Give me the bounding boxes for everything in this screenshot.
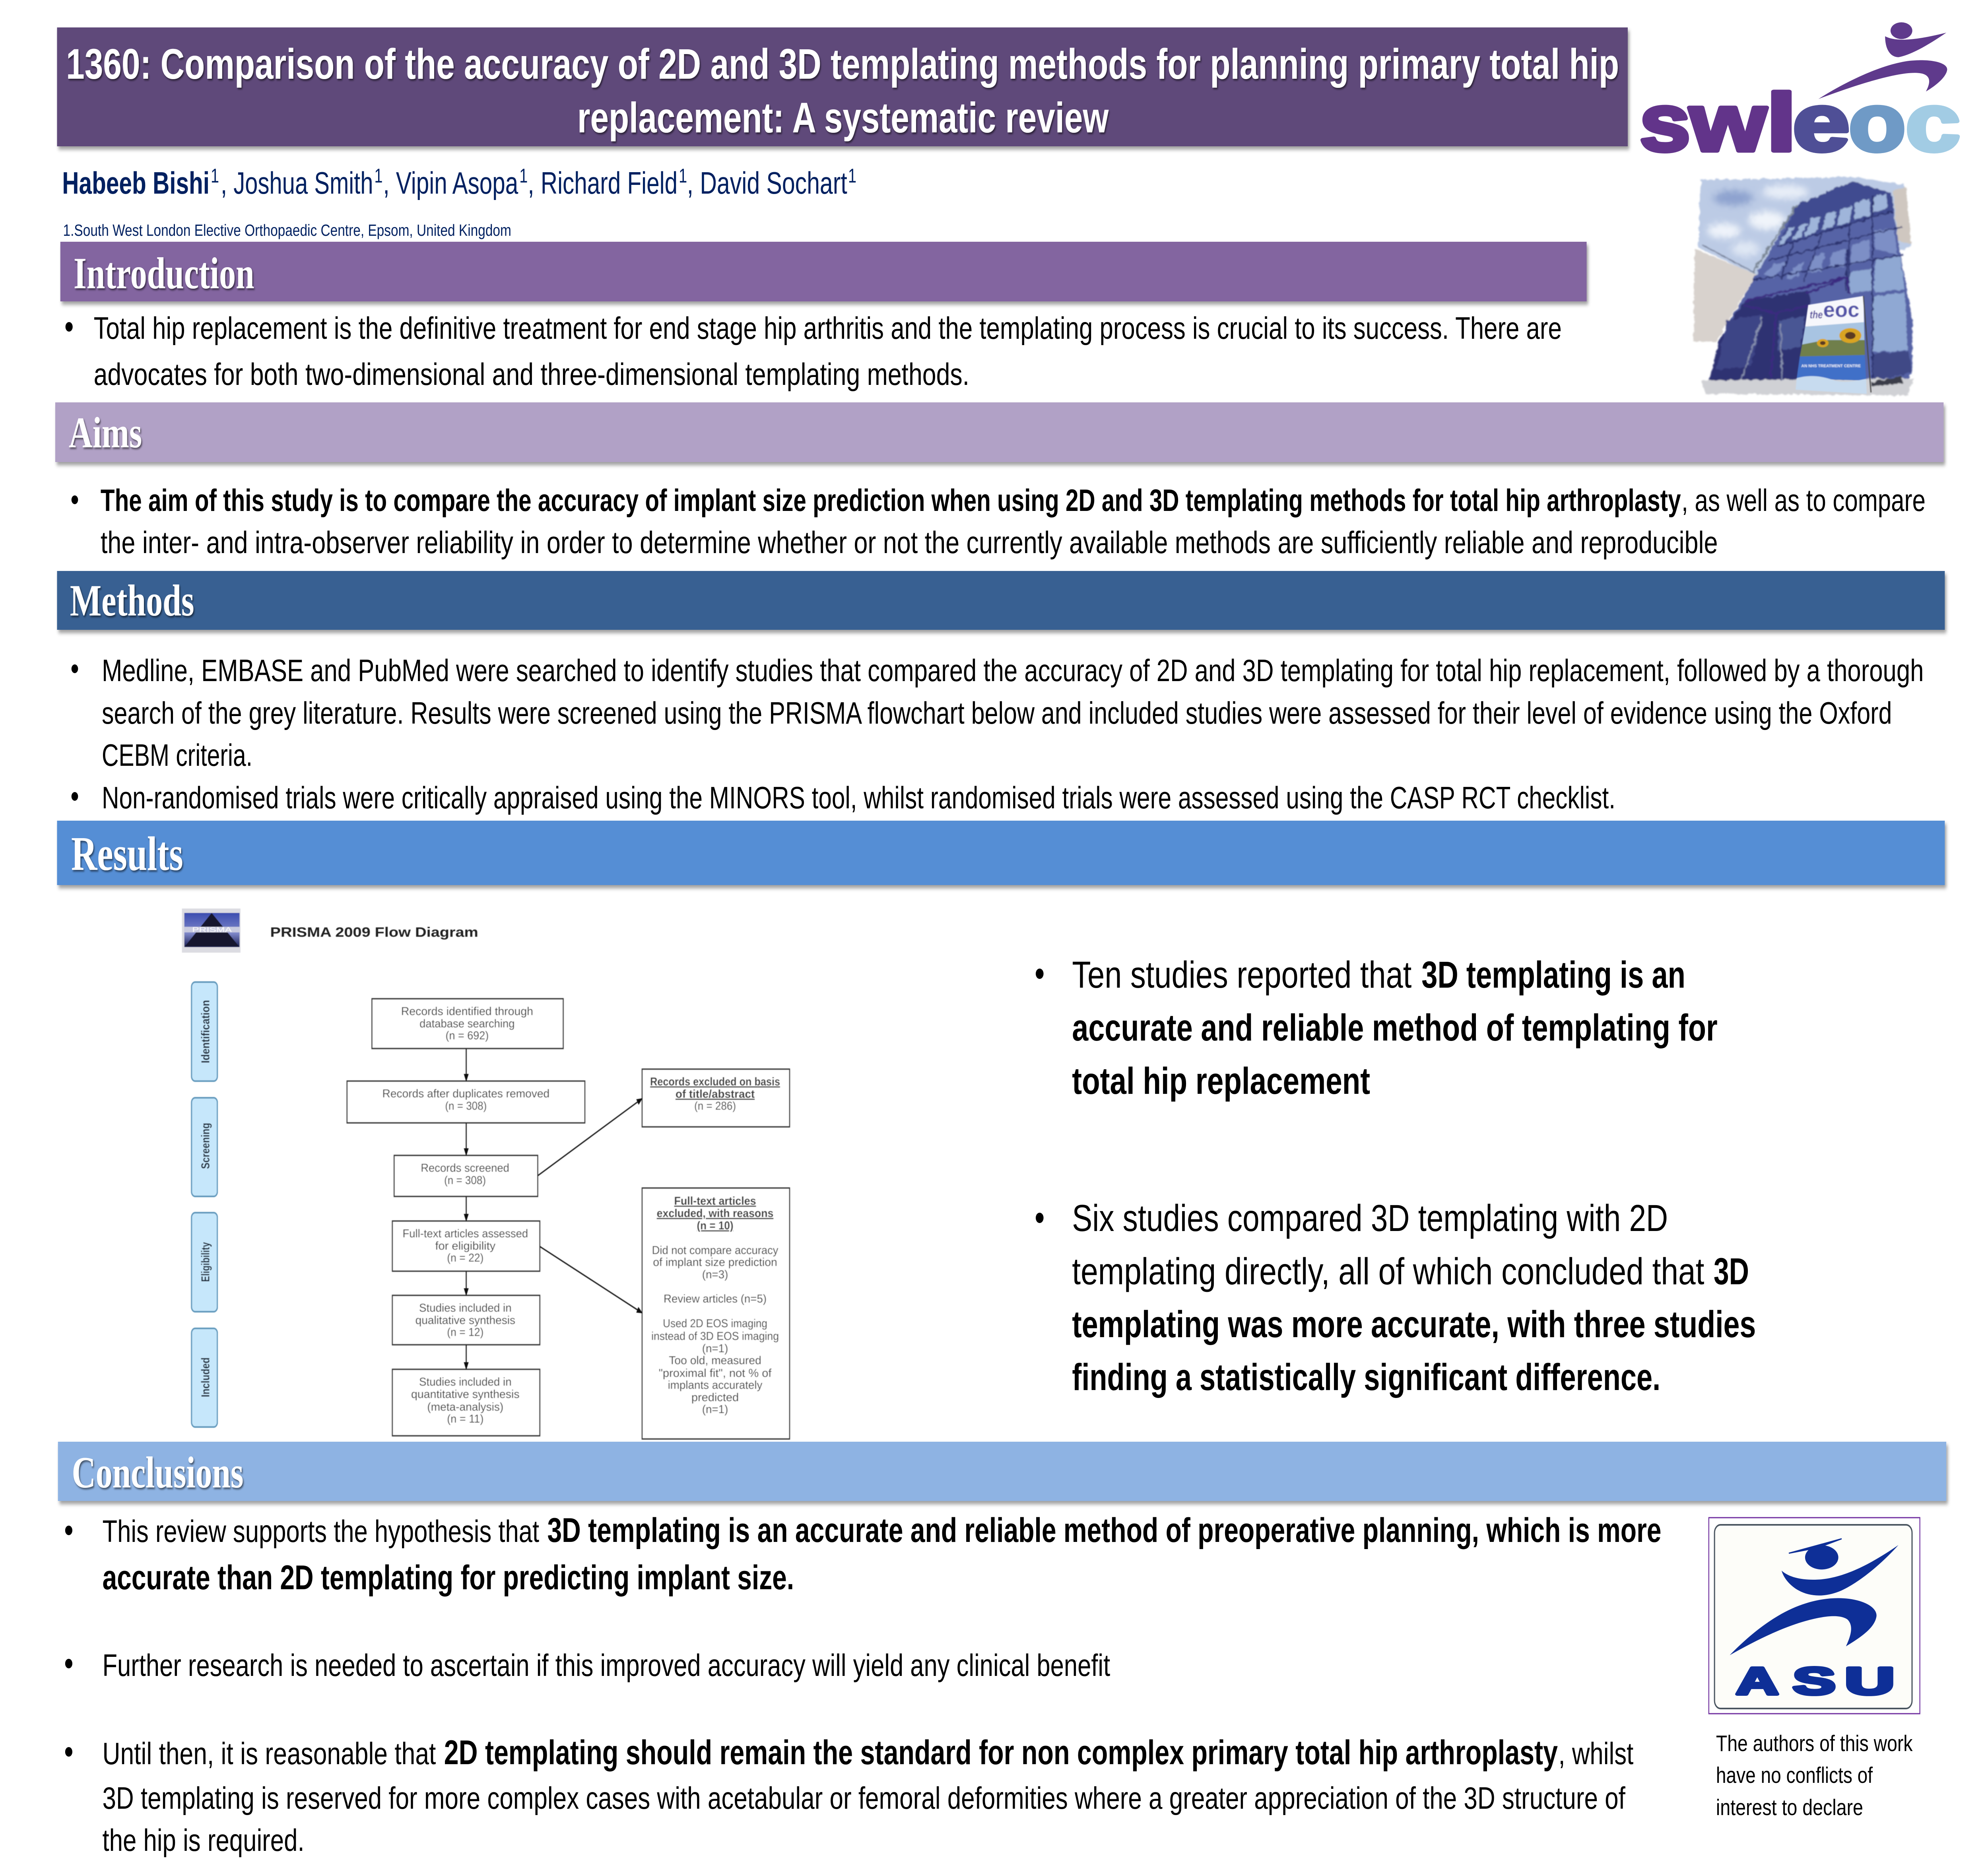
swleoc logo <box>1639 22 1961 168</box>
conflict of interest note: The authors of this work <box>1716 1730 1913 1756</box>
flow box: full-text excluded: implants accurately <box>668 1379 763 1392</box>
flow box: after duplicates <box>347 1081 585 1123</box>
sign text <box>1801 298 1861 369</box>
conclusion: 2D remains standard: , whilst <box>1559 1736 1633 1771</box>
authors: , Richard Field <box>528 165 678 200</box>
sign text: the <box>1810 309 1823 321</box>
conclusion: supports hypothesis: 3D templating is an accurate and reliable method of preoperative planning, which is more <box>547 1511 1661 1549</box>
sign text: AN NHS TREATMENT CENTRE <box>1801 364 1861 369</box>
methods text: search of the grey literature. Results were screened using the PRISMA flowchart below and included studies were assessed for their level of evidence using the Oxford <box>102 695 1892 730</box>
logo wordmark <box>1639 78 1961 168</box>
sign board <box>1796 296 1871 394</box>
finding: six studies <box>1036 1197 1756 1398</box>
flow box: full-text excluded: Review articles (n=5) <box>664 1293 767 1305</box>
affiliation: 1.South West London Elective Orthopaedic Centre, Epsom, United Kingdom <box>63 221 511 239</box>
building illustration <box>1693 177 1914 395</box>
flow box: records excluded: of title/abstract <box>676 1088 755 1101</box>
flow box: full-text assessed: (n = 22) <box>447 1252 483 1264</box>
flow box: full-text assessed: Full-text articles assessed <box>403 1227 528 1240</box>
conclusion: 2D remains standard: 3D templating is reserved for more complex cases with acetabular or femoral deformities where a greater appreciation of the 3D structure of <box>102 1780 1626 1815</box>
finding: ten studies: Ten studies reported that <box>1072 953 1411 996</box>
authors: , Vipin Asopa <box>383 165 518 200</box>
flow box: qualitative synthesis <box>392 1295 540 1345</box>
logo wordmark: l <box>1766 78 1797 168</box>
conclusion: further research: Further research is needed to ascertain if this improved accuracy will yield any clinical benefit <box>102 1648 1110 1683</box>
flow box: records screened <box>394 1155 538 1196</box>
conclusion: 2D remains standard: 2D templating should remain the standard for non complex primary total hip arthroplasty <box>444 1734 1558 1772</box>
PRISMA flow diagram <box>182 909 790 1439</box>
methods text: Medline, EMBASE and PubMed were searched to identify studies that compared the accuracy of 2D and 3D templating for total hip replacement, followed by a thorough <box>102 653 1924 688</box>
methods heading bar: Methods <box>70 577 194 625</box>
flow box: records excluded <box>642 1069 790 1127</box>
authors: 1 <box>375 165 383 187</box>
flow box: full-text excluded: Too old, measured <box>669 1354 761 1367</box>
flow box: records identified: (n = 692) <box>446 1029 489 1042</box>
logo wordmark: s <box>1639 78 1691 168</box>
flow box: full-text excluded: (n=3) <box>702 1268 728 1281</box>
ASU lettering <box>1736 1660 1895 1703</box>
finding: six studies: templating was more accurate, with three studies <box>1072 1303 1756 1345</box>
flow box: quantitative synthesis: (n = 11) <box>447 1413 483 1425</box>
finding: ten studies <box>1036 953 1718 1102</box>
stage label: eligibility: Eligibility <box>200 1242 212 1282</box>
methods text: Non-randomised trials were critically appraised using the MINORS tool, whilst randomised trials were assessed using the CASP RCT checklist. <box>102 780 1615 815</box>
stage label: identification <box>192 982 217 1081</box>
methods text: CEBM criteria. <box>102 738 252 773</box>
introduction text: advocates for both two-dimensional and three-dimensional templating methods. <box>94 357 969 392</box>
flow box: qualitative synthesis: Studies included in <box>419 1302 512 1314</box>
flow box: full-text excluded: Did not compare accuracy <box>652 1244 779 1257</box>
authors: Habeeb Bishi <box>62 165 210 200</box>
introduction heading bar <box>60 242 1586 301</box>
conclusion: 2D remains standard: Until then, it is reasonable that <box>102 1736 436 1771</box>
flow box: full-text excluded: "proximal fit", not % of <box>659 1367 772 1380</box>
flow box: full-text excluded: predicted <box>691 1391 739 1404</box>
finding: six studies: 3D <box>1714 1250 1749 1292</box>
aims text: , as well as to compare <box>1681 483 1926 518</box>
flow arrows <box>466 1048 642 1369</box>
finding: six studies: finding a statistically significant difference. <box>1072 1356 1660 1398</box>
section: introduction <box>60 242 1586 392</box>
flow box: quantitative synthesis: quantitative synthesis <box>411 1388 520 1401</box>
finding: six studies: Six studies compared 3D templating with 2D <box>1072 1197 1668 1239</box>
finding: ten studies: accurate and reliable method of templating for <box>1072 1006 1718 1048</box>
flow box: full-text excluded: (n=1) <box>702 1342 728 1355</box>
PRISMA logo: PRISMA <box>192 926 232 934</box>
conclusion: 2D remains standard <box>65 1734 1633 1858</box>
finding: six studies: templating directly, all of which concluded that <box>1072 1250 1704 1292</box>
conflict of interest note: interest to declare <box>1716 1794 1863 1820</box>
ASU logo <box>1709 1518 1920 1714</box>
authors: 1 <box>848 165 856 187</box>
flow box: full-text excluded: instead of 3D EOS imaging <box>651 1330 779 1343</box>
title banner <box>57 27 1628 146</box>
flow box: records identified <box>372 999 563 1048</box>
sign text: eoc <box>1823 298 1859 322</box>
flow box: full-text excluded: of implant size prediction <box>653 1256 777 1269</box>
introduction text: Total hip replacement is the definitive treatment for end stage hip arthritis and the templating process is crucial to its success. There are <box>94 311 1562 346</box>
flow box: records excluded: Records excluded on basis <box>650 1076 780 1088</box>
flow box: full-text excluded: excluded, with reasons <box>657 1207 773 1220</box>
flow box: after duplicates: (n = 308) <box>445 1100 487 1113</box>
flow box: quantitative synthesis: Studies included in <box>419 1376 512 1388</box>
flow box: full-text assessed: for eligibility <box>435 1240 495 1252</box>
stage label: screening: Screening <box>200 1123 212 1169</box>
authors: , David Sochart <box>687 165 847 200</box>
section: results heading bar: Results <box>71 827 183 881</box>
logo wordmark: o <box>1849 78 1906 168</box>
section: aims <box>55 402 1943 560</box>
section: conclusions <box>58 1442 1946 1858</box>
finding: ten studies: total hip replacement <box>1072 1060 1370 1102</box>
flow box: records screened: Records screened <box>421 1162 509 1175</box>
flow box: after duplicates: Records after duplicates removed <box>382 1087 549 1100</box>
stage label: included: Included <box>200 1357 212 1397</box>
stage label: screening <box>192 1098 217 1196</box>
ASU lettering: A <box>1736 1660 1778 1703</box>
section: methods <box>57 571 1945 815</box>
flow box: records identified: database searching <box>419 1017 515 1030</box>
flow box: quantitative synthesis <box>392 1369 540 1436</box>
PRISMA logo <box>182 909 241 953</box>
aims text: the inter- and intra-observer reliability in order to determine whether or not the currently available methods are sufficiently reliable and reproducible <box>101 525 1718 560</box>
flow box: full-text excluded: (n=1) <box>702 1403 728 1416</box>
methods heading bar <box>57 571 1945 630</box>
flow box: records screened: (n = 308) <box>444 1174 486 1187</box>
aims heading bar <box>55 402 1943 462</box>
results findings text <box>1036 953 1756 1398</box>
aims text <box>72 483 1926 560</box>
diagram title: PRISMA 2009 Flow Diagram <box>270 925 478 940</box>
authors: 1 <box>519 165 528 187</box>
flow box: records excluded: (n = 286) <box>694 1100 736 1113</box>
finding: ten studies: 3D templating is an <box>1421 953 1685 996</box>
flow box: qualitative synthesis: qualitative synthesis <box>415 1314 515 1327</box>
flow box: full-text excluded <box>642 1188 790 1439</box>
title text <box>66 40 1619 142</box>
conflict of interest note: have no conflicts of <box>1716 1762 1873 1788</box>
conflict of interest note <box>1716 1730 1913 1820</box>
flow box: full-text excluded: (n = 10) <box>697 1219 734 1232</box>
aims text: The aim of this study is to compare the accuracy of implant size prediction when using 2D and 3D templating methods for total hip arthroplasty <box>101 483 1681 518</box>
section: results heading bar <box>57 821 1945 885</box>
conclusions heading bar <box>58 1442 1946 1501</box>
painted building scene <box>1693 177 1914 395</box>
conclusions heading bar: Conclusions <box>72 1448 243 1497</box>
logo wordmark: w <box>1689 78 1767 168</box>
flow box: full-text excluded: Used 2D EOS imaging <box>663 1317 767 1330</box>
conclusion: supports hypothesis <box>65 1511 1661 1597</box>
introduction heading bar: Introduction <box>74 249 254 298</box>
conclusion: supports hypothesis: This review supports the hypothesis that <box>102 1514 539 1549</box>
stage label: included <box>192 1328 217 1427</box>
stage label: eligibility <box>192 1213 217 1312</box>
ASU lettering: U <box>1845 1660 1895 1703</box>
authors: 1 <box>211 165 219 187</box>
methods text <box>72 653 1924 815</box>
flow box: quantitative synthesis: (meta-analysis) <box>427 1401 503 1413</box>
logo wordmark: c <box>1905 78 1961 168</box>
stage label: identification: Identification <box>200 1000 212 1063</box>
flow box: full-text assessed <box>392 1221 540 1271</box>
title text: replacement: A systematic review <box>577 94 1109 142</box>
logo wordmark: e <box>1792 78 1850 168</box>
ASU figure <box>1730 1539 1899 1655</box>
authors: 1 <box>679 165 687 187</box>
introduction text <box>66 311 1562 392</box>
ASU lettering: S <box>1793 1660 1835 1703</box>
flow box: records identified: Records identified through <box>401 1005 533 1018</box>
authors <box>62 165 856 200</box>
flow box: full-text excluded: Full-text articles <box>674 1195 756 1208</box>
logo figure <box>1818 22 1947 99</box>
aims heading bar: Aims <box>69 409 142 457</box>
conclusion: supports hypothesis: accurate than 2D templating for predicting implant size. <box>102 1559 794 1597</box>
authors: , Joshua Smith <box>221 165 373 200</box>
flow box: qualitative synthesis: (n = 12) <box>447 1326 483 1339</box>
title text: 1360: Comparison of the accuracy of 2D and 3D templating methods for planning primary total hip <box>66 40 1619 88</box>
conclusion: 2D remains standard: the hip is required. <box>102 1823 305 1858</box>
